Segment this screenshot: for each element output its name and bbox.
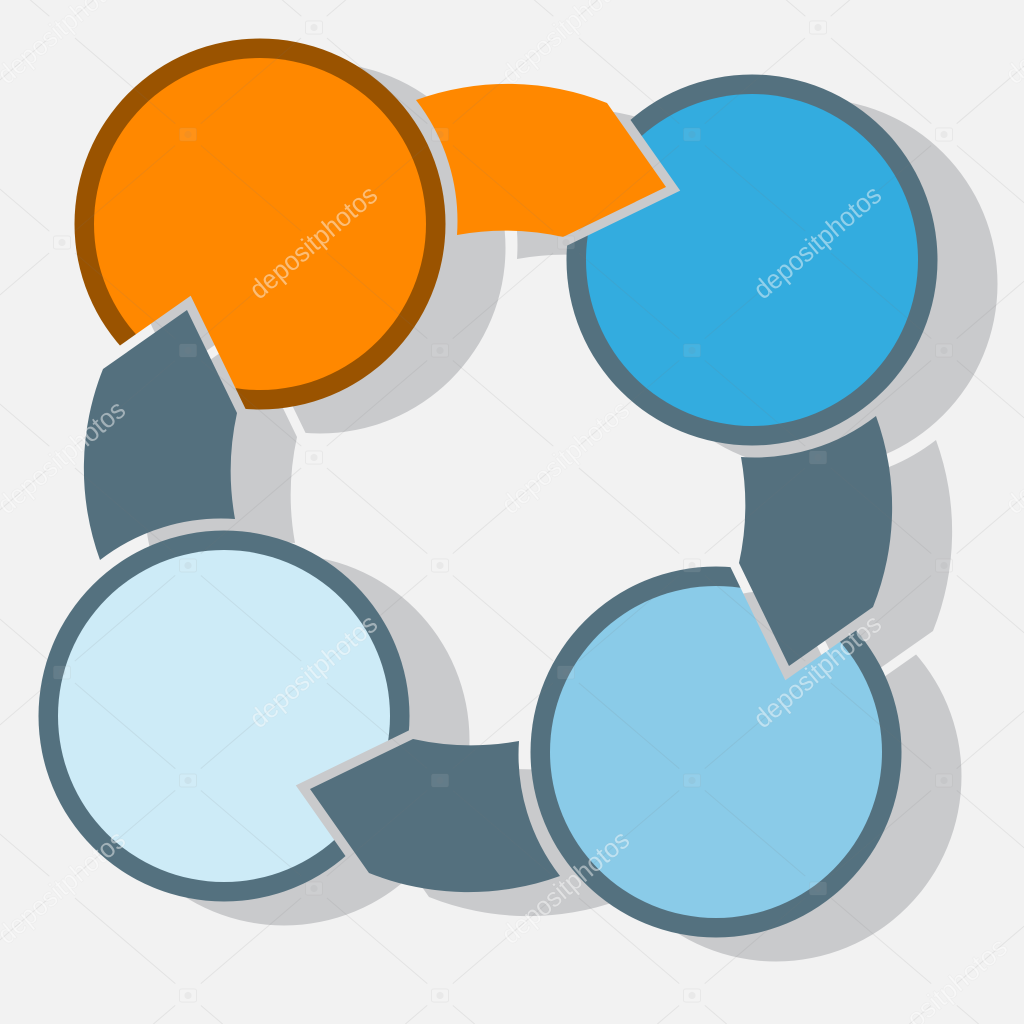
watermark text: depositphotos — [244, 609, 383, 734]
arrow: pale blue to orange — [84, 310, 237, 560]
watermark text: depositphotos — [748, 609, 887, 734]
circle: pale blue — [38, 530, 410, 902]
circle: blue — [566, 74, 938, 446]
circle: light blue — [530, 566, 902, 938]
drop shadows of circles and arrows — [98, 62, 998, 962]
watermark text: depositphotos — [748, 180, 887, 305]
arrow: orange to blue — [416, 84, 666, 237]
watermark text: depositphotos — [244, 180, 383, 305]
watermark text: depositphotos — [496, 825, 635, 950]
arrow: blue to light blue — [739, 416, 892, 666]
arrow: light blue to pale blue — [310, 739, 560, 892]
circle: orange — [74, 38, 446, 410]
watermark text: depositphotos — [496, 395, 635, 520]
